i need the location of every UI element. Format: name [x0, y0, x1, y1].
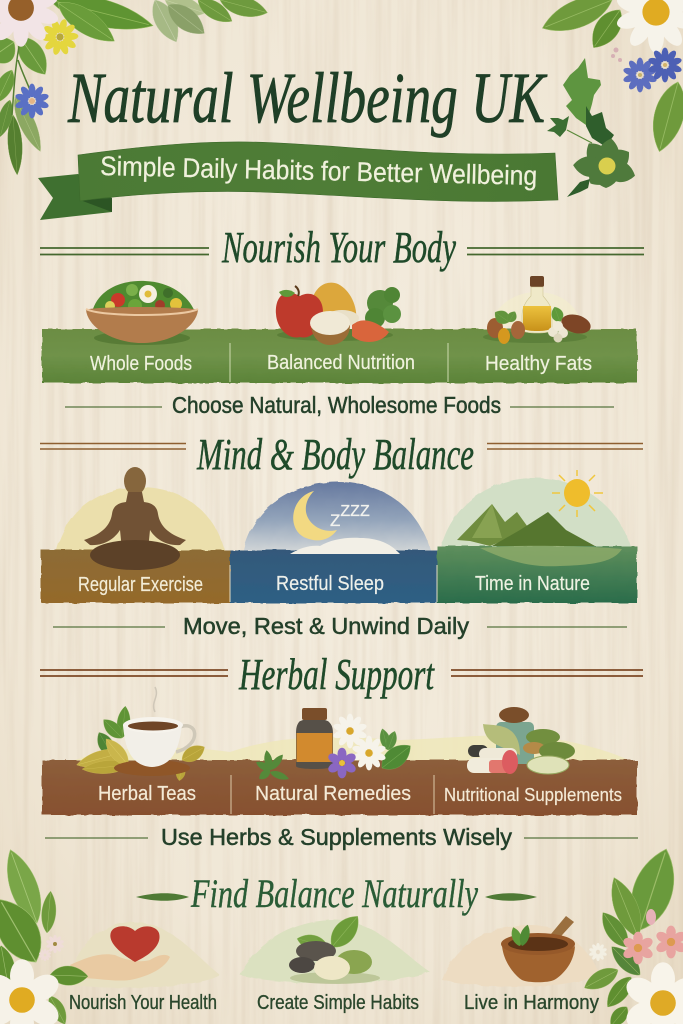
top-left floral corner: [0, 0, 270, 175]
section heading: Mind & Body Balance: [196, 430, 474, 479]
coloured label band: [41, 546, 637, 603]
icon: supplements: [467, 707, 575, 774]
label: Nourish Your Health: Nourish Your Health: [69, 992, 217, 1014]
section: Find Balance Naturally: [68, 871, 600, 1014]
bottom-left floral corner: [0, 845, 88, 1024]
green label band: [42, 329, 637, 383]
icon: leaves and stones: [289, 910, 380, 984]
label: Live in Harmony: Live in Harmony: [464, 992, 599, 1014]
label: Balanced Nutrition: Balanced Nutrition: [267, 352, 415, 374]
bottom-right floral corner: [581, 843, 683, 1024]
icon: salad bowl: [86, 281, 198, 345]
label: Create Simple Habits: Create Simple Habits: [257, 992, 419, 1014]
watercolour patches: [68, 920, 600, 988]
heading rules: [40, 670, 643, 676]
zzz letters: ZZZ: [340, 503, 370, 520]
icon: heart in hand: [70, 926, 170, 981]
label: Whole Foods: Whole Foods: [90, 353, 192, 375]
icon: moon, zzz, cloud: [290, 491, 400, 554]
section: Mind & Body Balance: [40, 430, 643, 639]
icon: herbal tea cup: [75, 687, 208, 782]
icon: mountains and sun: [457, 470, 622, 566]
label: Restful Sleep: Restful Sleep: [276, 573, 384, 595]
watercolour domes: [56, 478, 632, 552]
icon: mortar and pestle: [501, 916, 575, 982]
tagline with rules: Move, Rest & Unwind Daily: [183, 613, 470, 639]
label: Herbal Teas: Herbal Teas: [98, 783, 196, 805]
label: Healthy Fats: Healthy Fats: [485, 353, 592, 375]
top-right floral corner: [537, 0, 683, 155]
icon: apple, honeycomb, parsley, citrus: [276, 283, 401, 345]
label: Regular Exercise: Regular Exercise: [78, 574, 203, 596]
heading rules: [40, 248, 644, 254]
section heading: Nourish Your Body: [221, 223, 456, 272]
tagline with rules: Use Herbs & Supplements Wisely: [161, 824, 513, 850]
section heading: Herbal Support: [238, 650, 435, 699]
tagline with rules: Choose Natural, Wholesome Foods: [172, 392, 501, 418]
section heading: Find Balance Naturally: [190, 871, 478, 916]
section: Nourish Your Body: [40, 223, 644, 418]
subtitle ribbon: [38, 142, 558, 220]
label: Nutritional Supplements: Nutritional Supplements: [444, 784, 622, 805]
icon: remedy bottle and flowers: [254, 708, 416, 782]
brown label band: [42, 760, 637, 815]
icon: olive oil, nuts: [483, 276, 593, 344]
icon: meditating figure: [84, 467, 186, 570]
heading rules: [40, 444, 643, 449]
pale hill backdrop: [70, 735, 632, 762]
zzz letters: Z: [330, 511, 340, 530]
label: Time in Nature: Time in Nature: [475, 573, 590, 595]
herb sprig: leaves and green flower by the title: [547, 58, 638, 197]
heading leaf rules: [136, 893, 537, 901]
section: Herbal Support: [40, 650, 643, 850]
subtitle text: Simple Daily Habits for Better Wellbeing: [100, 151, 537, 191]
label: Natural Remedies: Natural Remedies: [255, 783, 411, 805]
